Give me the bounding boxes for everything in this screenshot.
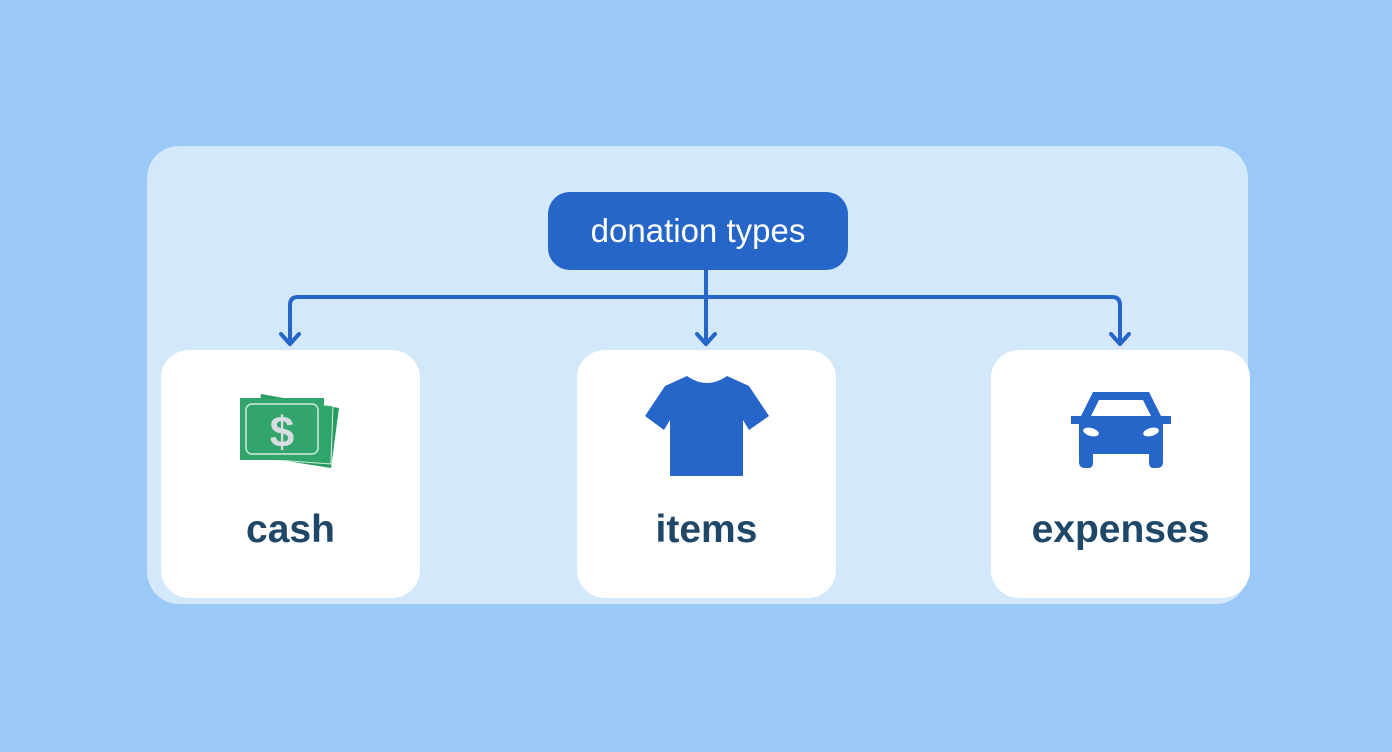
label: expenses: expenses bbox=[1032, 508, 1209, 551]
card: cash bbox=[161, 350, 420, 598]
icon: cash bills bbox=[240, 394, 339, 468]
panel: background container bbox=[147, 146, 1248, 604]
label: items: items bbox=[656, 508, 757, 551]
icon: t-shirt bbox=[645, 376, 769, 476]
title: donation types bbox=[591, 212, 805, 249]
card: expenses bbox=[991, 350, 1250, 598]
label: cash: cash bbox=[246, 508, 335, 551]
card: items bbox=[577, 350, 836, 598]
icon: cash bills: $ bbox=[270, 408, 294, 457]
title bbox=[548, 192, 848, 270]
icon: car bbox=[1071, 392, 1171, 468]
